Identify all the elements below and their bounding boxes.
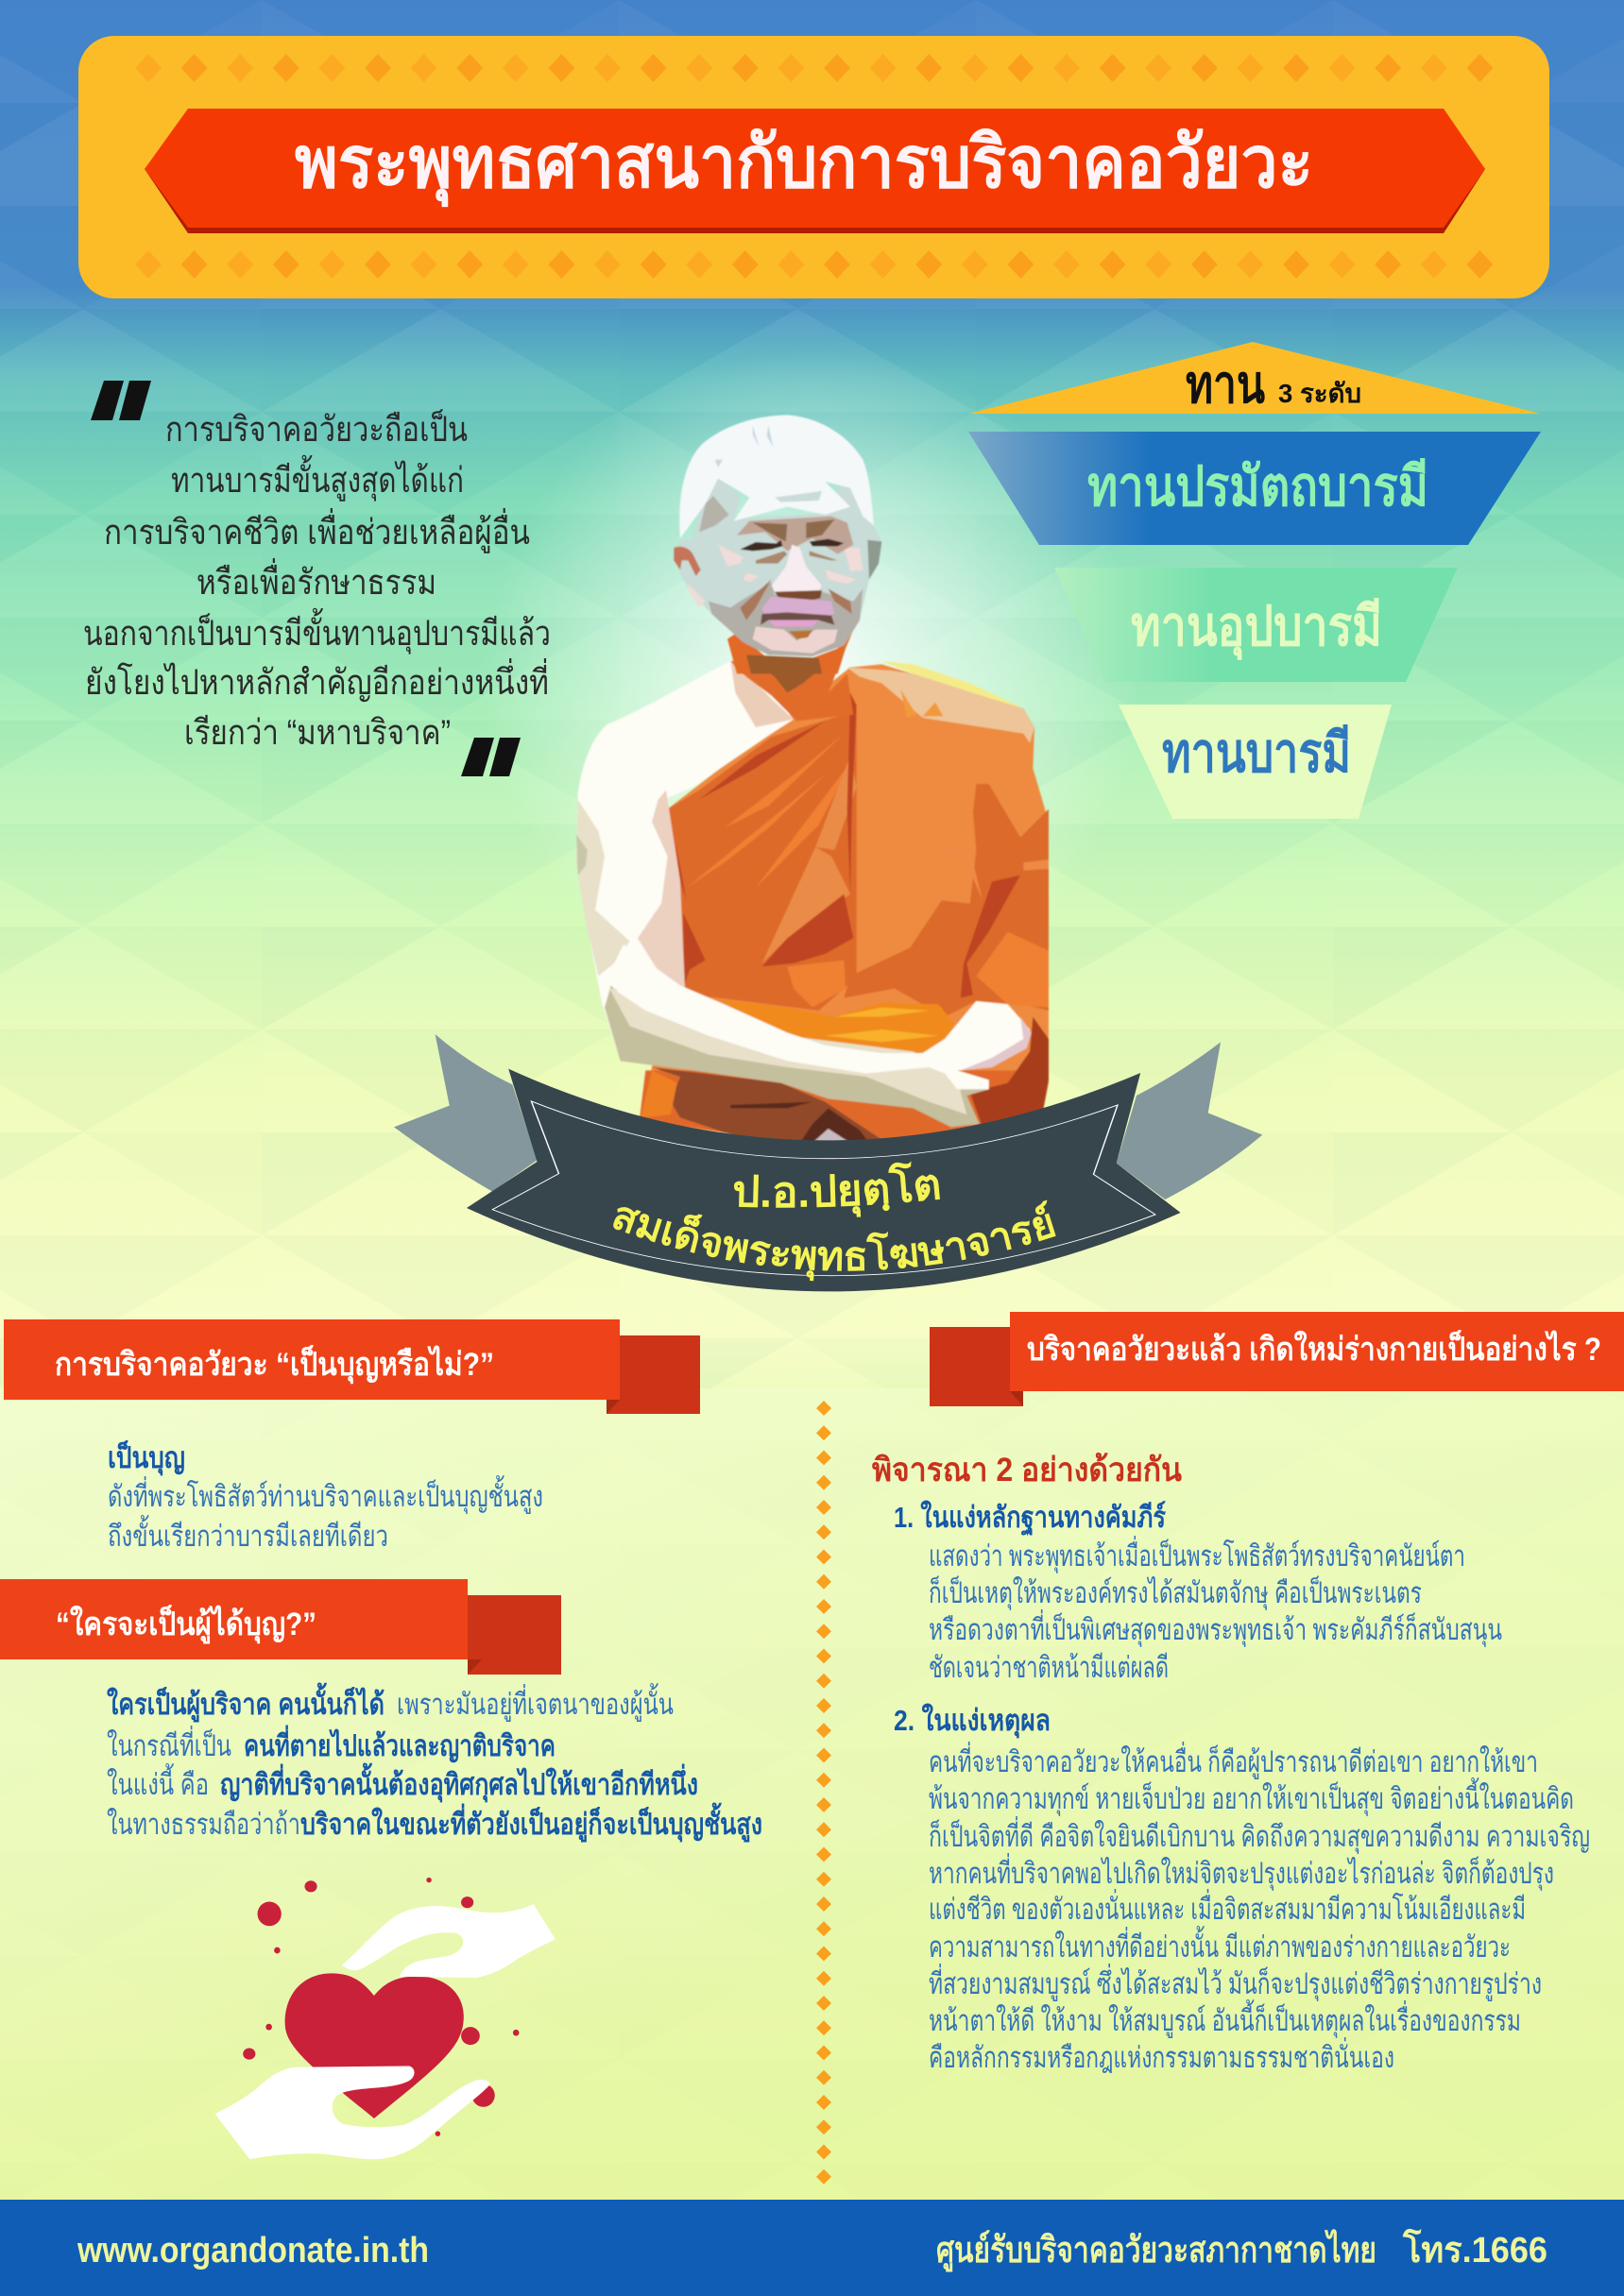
text block: who receives merit: บริจาคในขณะที่ตัวยังเป็นอยู่ก็จะเป็นบุญชั้นสูง [300, 1802, 762, 1843]
level 3: ทานบารมี [1162, 723, 1351, 784]
monk portrait [576, 415, 1049, 1146]
top hand [342, 1904, 556, 1978]
quote block: ทานบารมีขั้นสูงสุดได้แก่ [171, 454, 464, 502]
section header: who receives merit [0, 1579, 561, 1675]
text block: who receives merit: ใครเป็นผู้บริจาค คนนั้นก็ได้ [107, 1682, 385, 1723]
text block: who receives merit: ญาติที่บริจาคนั้นต้องอุทิศกุศลไปให้เขาอีกทีหนึ่ง [220, 1762, 698, 1803]
text block: merit answer: เป็นบุญ [108, 1439, 185, 1476]
title ribbon [145, 109, 1485, 233]
icon: heart in hands [215, 1878, 556, 2159]
ribbon shape [394, 1034, 1262, 1291]
quote block: การบริจาคอวัยวะถือเป็น [165, 407, 468, 449]
item 2 [894, 1703, 1590, 2074]
level 3 [1119, 705, 1392, 819]
title banner [78, 36, 1549, 298]
text block: who receives merit: คนที่ตายไปแล้วและญาติบริจาค [244, 1725, 556, 1763]
icon: opening quote mark [91, 381, 151, 420]
monk body [576, 661, 1049, 1146]
dotted divider [814, 1400, 833, 2193]
quote block: การบริจาคชีวิต เพื่อช่วยเหลือผู้อื่น [104, 507, 530, 553]
pyramid top: 3 ระดับ [1278, 379, 1361, 408]
website: www.organdonate.in.th [77, 2231, 429, 2270]
title text: สมเด็จพระพุทธโฆษาจารย์ [613, 1199, 1056, 1281]
text block: two considerations [872, 1452, 1590, 2074]
text block: merit answer [108, 1439, 543, 1553]
section header: who receives merit: “ใครจะเป็นผู้ได้บุญ?” [56, 1604, 316, 1644]
contact: ศูนย์รับบริจาคอวัยวะสภากาชาดไทย [936, 2229, 1376, 2272]
footer bar [0, 2200, 1624, 2296]
heading: พิจารณา 2 อย่างด้วยกัน [872, 1452, 1182, 1488]
text block: who receives merit [107, 1682, 762, 1843]
quote block: หรือเพื่อรักษาธรรม [197, 557, 436, 602]
item 1: ชัดเจนว่าชาติหน้ามีแต่ผลดี [929, 1651, 1169, 1684]
name ribbon [394, 1034, 1262, 1292]
item 1: 1. ในแง่หลักฐานทางคัมภีร์ [894, 1500, 1166, 1537]
text block: who receives merit: เพราะมันอยู่ที่เจตนาของผู้นั้น [397, 1683, 674, 1722]
dana pyramid [968, 342, 1541, 819]
section header: rebirth [930, 1312, 1624, 1406]
dots [243, 1878, 519, 2136]
text block: merit answer: ดังที่พระโพธิสัตว์ท่านบริจาคและเป็นบุญชั้นสูง [108, 1475, 543, 1515]
item 2: 2. ในแง่เหตุผล [894, 1703, 1051, 1739]
quote block: นอกจากเป็นบารมีขั้นทานอุปบารมีแล้ว [83, 607, 551, 655]
heart [285, 1973, 464, 2118]
text block: who receives merit: ในทางธรรมถือว่าถ้า [107, 1808, 300, 1841]
level 1: ทานปรมัตถบารมี [1087, 456, 1428, 518]
title text: พระพุทธศาสนากับการบริจาคอวัยวะ [295, 123, 1313, 208]
name text: ป.อ.ปยุตฺโต [734, 1162, 940, 1217]
text block: merit answer: ถึงขั้นเรียกว่าบารมีเลยทีเดียว [108, 1515, 388, 1553]
quote block [83, 381, 551, 776]
section header: merit [4, 1319, 700, 1414]
monk head [674, 415, 881, 673]
level 1 [968, 432, 1541, 545]
pyramid top: ทาน [1186, 354, 1265, 414]
bottom hand [215, 2066, 489, 2159]
icon: closing quote mark [461, 738, 521, 776]
quote block: เรียกว่า “มหาบริจาค” [184, 713, 451, 752]
level 2: ทานอุปบารมี [1131, 596, 1382, 661]
text block: who receives merit: ในแง่นี้ คือ [107, 1763, 209, 1801]
pyramid top [968, 342, 1541, 414]
item 1: ก็เป็นเหตุให้พระองค์ทรงได้สมันตจักษุ คือเป็นพระเนตร [929, 1575, 1422, 1611]
text block: who receives merit: ในกรณีที่เป็น [107, 1726, 231, 1762]
item 1 [894, 1500, 1502, 1684]
level 2 [1054, 568, 1458, 682]
phone: โทร.1666 [1402, 2228, 1547, 2270]
section header: merit: การบริจาคอวัยวะ “เป็นบุญหรือไม่?” [55, 1344, 494, 1385]
quote block: ยังโยงไปหาหลักสำคัญอีกอย่างหนึ่งที่ [85, 657, 549, 703]
item 2: คือหลักกรรมหรือกฎแห่งกรรมตามธรรมชาตินั่นเอง [929, 2037, 1394, 2074]
